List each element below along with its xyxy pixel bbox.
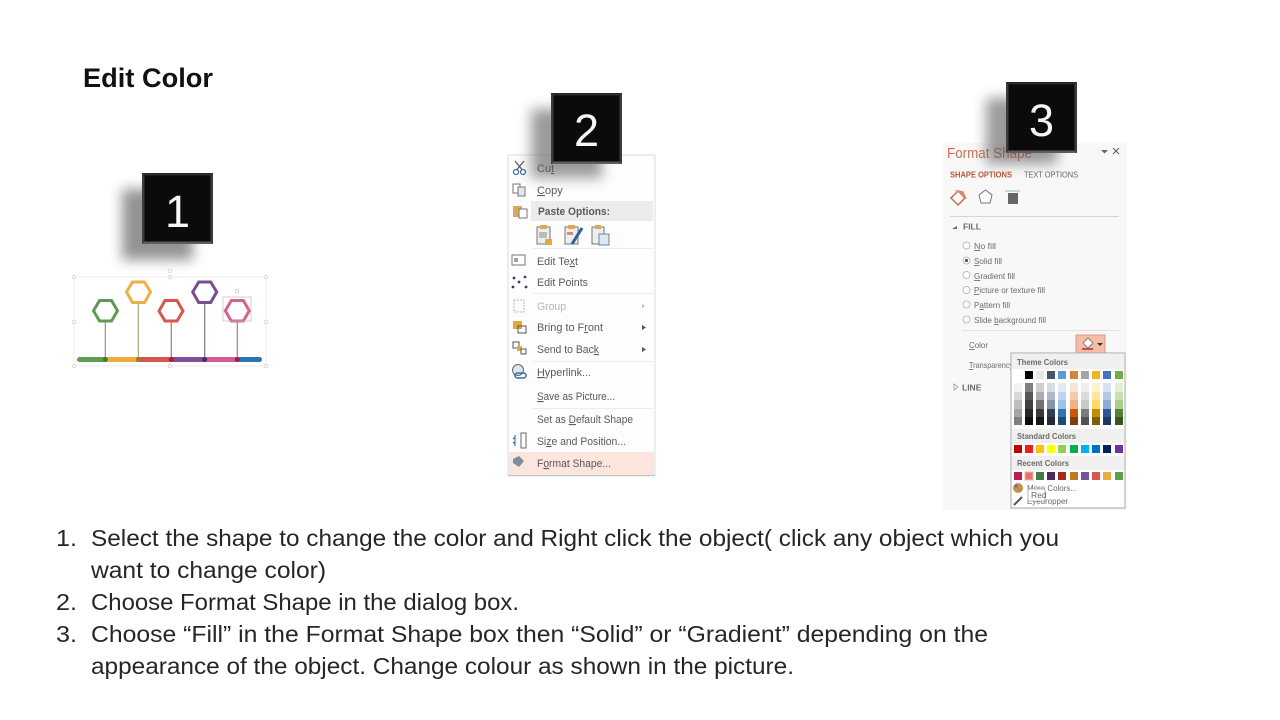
color picker headers [1012,354,1124,470]
pane tabs: TEXT OPTIONS [1024,170,1078,180]
fill section [952,222,1046,325]
hexagon: pink selected [223,289,251,321]
instructions list: 3. [56,621,77,647]
menu labels: Paste Options: [538,206,610,218]
number badge 3 [986,82,1077,164]
fill section: Slide background fill [974,315,1046,325]
recent colors row [1014,472,1123,480]
menu labels: Save as Picture... [537,391,615,403]
stems and nodes [103,304,240,362]
color and transparency labels: Color [969,340,988,350]
pane tabs: SHAPE OPTIONS [950,170,1012,180]
instructions list: Choose Format Shape in the dialog box. [91,589,519,615]
title: Edit Color [83,63,213,93]
menu labels: Hyperlink... [537,367,591,379]
color picker headers: Theme Colors [1017,357,1068,367]
menu labels: Group [537,301,566,313]
theme colors row [1014,371,1123,379]
fill section: Solid fill [974,256,1002,266]
fill section: FILL [963,222,981,232]
fill section: No fill [974,241,996,251]
instructions list: Select the shape to change the color and Right click the object( click any object which you [91,525,1059,551]
hexagon: yellow [126,282,150,302]
menu labels: Bring to Front [537,322,603,334]
instructions list: appearance of the object. Change colour as shown in the picture. [91,653,794,679]
panel: context menu [508,155,655,476]
pane title: Format Shape [947,146,1032,162]
color and transparency labels: Transparency [969,360,1014,370]
theme color shades [1014,383,1123,425]
instructions list: want to change color) [90,557,326,583]
pane tabs [950,170,1078,180]
number badge 2 [531,93,622,178]
instructions list: 2. [56,589,77,615]
color picker headers: Standard Colors [1017,431,1076,441]
submenu arrows [642,304,646,352]
menu labels [537,163,633,470]
standard colors row [1014,445,1123,453]
fill section: Gradient fill [974,271,1015,281]
color and transparency labels [954,340,1014,392]
color picker headers: Recent Colors [1017,458,1069,468]
color and transparency labels: LINE [962,382,982,392]
number badge 3: 3 [1029,95,1054,146]
number badge 2: 2 [574,105,599,156]
pane icons [951,190,1020,205]
tooltip: red: Red [1031,490,1047,500]
menu labels: Cut [537,163,554,175]
fill section: Pattern fill [974,300,1010,310]
menu labels: Send to Back [537,344,599,356]
menu labels: Format Shape... [537,458,611,470]
menu labels: Copy [537,185,563,197]
hexagon: green [94,300,118,321]
pane close controls [1101,148,1119,154]
fill section: Picture or texture fill [974,285,1045,295]
hexagon: red [159,300,183,321]
color button [1076,335,1105,353]
number badge 1 [122,173,213,260]
panel: format shape pane [943,143,1127,510]
menu labels: Edit Text [537,256,578,268]
more colors and eyedropper: More Colors... [1027,483,1077,493]
hexagon: purple [193,282,217,302]
instructions list [56,525,1059,679]
menu labels: Set as Default Shape [537,414,633,426]
panel: timeline shape selection [72,269,268,368]
number badge 1: 1 [165,186,190,237]
menu labels: Edit Points [537,277,588,289]
instructions list: 1. [56,525,77,551]
more colors and eyedropper [1013,483,1077,506]
timeline bar [77,357,262,362]
tooltip: red [1028,489,1047,501]
color picker popup [1011,353,1125,508]
instructions list: Choose “Fill” in the Format Shape box then “Solid” or “Gradient” depending on the [91,621,988,647]
menu icons [512,161,609,467]
menu labels: Size and Position... [537,436,626,448]
more colors and eyedropper: Eyedropper [1027,496,1068,506]
